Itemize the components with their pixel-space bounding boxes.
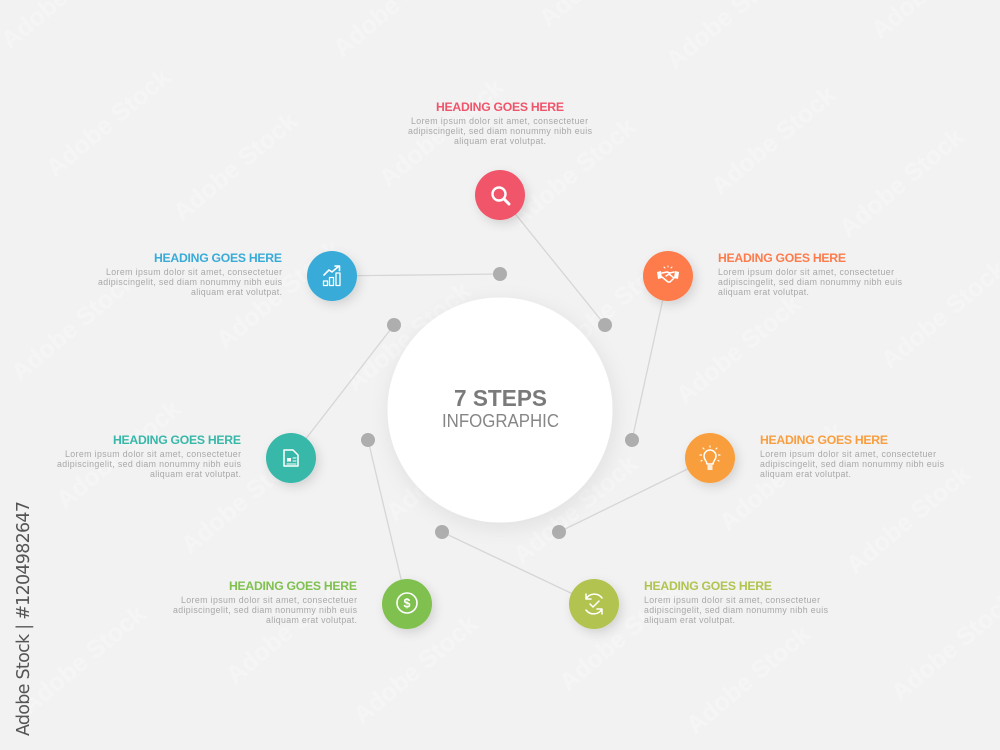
watermark pattern: Adobe Stock xyxy=(714,417,849,537)
step 1: red xyxy=(408,100,593,220)
body text: adipiscingelit, sed diam nonummy nibh euis xyxy=(98,277,283,287)
body text: adipiscingelit, sed diam nonummy nibh euis xyxy=(644,605,829,615)
watermark pattern: Adobe Stock xyxy=(6,267,141,387)
stock id label: Adobe Stock | #1204982647 xyxy=(14,501,34,736)
body text: adipiscingelit, sed diam nonummy nibh euis xyxy=(408,126,593,136)
heading: HEADING GOES HERE xyxy=(718,251,846,265)
body text: Lorem ipsum dolor sit amet, consectetuer xyxy=(106,267,282,277)
icon: magnifier xyxy=(475,170,525,220)
body text: aliquam erat volutpat. xyxy=(150,469,241,479)
watermark pattern: Adobe Stock xyxy=(706,81,841,201)
body text: adipiscingelit, sed diam nonummy nibh euis xyxy=(760,459,945,469)
body text: Lorem ipsum dolor sit amet, consectetuer xyxy=(718,267,894,277)
watermark pattern: Adobe Stock xyxy=(41,63,176,183)
body text: aliquam erat volutpat. xyxy=(644,615,735,625)
step 3: amber xyxy=(685,433,945,483)
body text: Lorem ipsum dolor sit amet, consectetuer xyxy=(644,595,820,605)
heading: HEADING GOES HERE xyxy=(113,433,241,447)
watermark pattern: Adobe Stock xyxy=(211,235,346,355)
step 7: blue xyxy=(98,251,357,301)
body text: adipiscingelit, sed diam nonummy nibh euis xyxy=(57,459,242,469)
watermark pattern: Adobe Stock xyxy=(841,460,976,580)
watermark pattern: Adobe Stock xyxy=(176,440,311,560)
step 6: teal xyxy=(57,433,316,483)
body text: aliquam erat volutpat. xyxy=(454,136,546,146)
connector end dots xyxy=(361,267,639,539)
body text xyxy=(173,595,358,625)
center title: 7 STEPS xyxy=(454,385,547,411)
body text: aliquam erat volutpat. xyxy=(191,287,282,297)
watermark pattern: Adobe Stock xyxy=(544,247,679,367)
heading: HEADING GOES HERE xyxy=(436,100,564,114)
heading: HEADING GOES HERE xyxy=(760,433,888,447)
icon: refresh check xyxy=(569,579,619,629)
center circle xyxy=(388,298,612,522)
body text xyxy=(98,267,283,297)
body text xyxy=(644,595,829,625)
body text: adipiscingelit, sed diam nonummy nibh euis xyxy=(718,277,903,287)
watermark pattern: Adobe Stock xyxy=(348,610,483,730)
body text: Lorem ipsum dolor sit amet, consectetuer xyxy=(181,595,357,605)
watermark pattern: Adobe Stock xyxy=(506,113,641,233)
body text: Lorem ipsum dolor sit amet, consectetuer xyxy=(760,449,936,459)
step 5: green xyxy=(173,579,432,629)
icon: growth chart xyxy=(307,251,357,301)
body text xyxy=(57,449,242,479)
body text: aliquam erat volutpat. xyxy=(760,469,851,479)
watermark pattern: Adobe Stock xyxy=(221,570,356,690)
body text: aliquam erat volutpat. xyxy=(718,287,809,297)
step 2: orange xyxy=(643,251,903,301)
watermark pattern: Adobe Stock xyxy=(554,577,689,697)
body text: Lorem ipsum dolor sit amet, consectetuer xyxy=(411,116,588,126)
body text: aliquam erat volutpat. xyxy=(266,615,357,625)
watermark pattern: Adobe Stock xyxy=(341,277,476,397)
watermark pattern: Adobe Stock xyxy=(508,450,643,570)
icon: handshake xyxy=(643,251,693,301)
icon: dollar coin xyxy=(382,579,432,629)
connector lines xyxy=(291,195,710,604)
watermark pattern: Adobe Stock xyxy=(374,73,509,193)
center subtitle: INFOGRAPHIC xyxy=(442,411,559,431)
watermark pattern: Adobe Stock xyxy=(51,395,186,515)
icon: light bulb xyxy=(685,433,735,483)
watermark pattern: Adobe Stock xyxy=(671,290,806,410)
body text xyxy=(760,449,945,479)
body text: adipiscingelit, sed diam nonummy nibh euis xyxy=(173,605,358,615)
watermark pattern: Adobe Stock xyxy=(834,123,969,243)
icon: document xyxy=(266,433,316,483)
watermark pattern: Adobe Stock xyxy=(168,107,303,227)
body text xyxy=(718,267,903,297)
watermark pattern: Adobe Stock xyxy=(16,600,151,720)
heading: HEADING GOES HERE xyxy=(644,579,772,593)
body text xyxy=(408,116,593,146)
icon: dollar coin: $ xyxy=(404,596,411,610)
step 4: lime xyxy=(569,579,829,629)
watermark pattern: Adobe Stock xyxy=(381,407,516,527)
body text: Lorem ipsum dolor sit amet, consectetuer xyxy=(65,449,241,459)
heading: HEADING GOES HERE xyxy=(154,251,282,265)
heading: HEADING GOES HERE xyxy=(229,579,357,593)
watermark pattern: Adobe Stock xyxy=(681,620,816,740)
